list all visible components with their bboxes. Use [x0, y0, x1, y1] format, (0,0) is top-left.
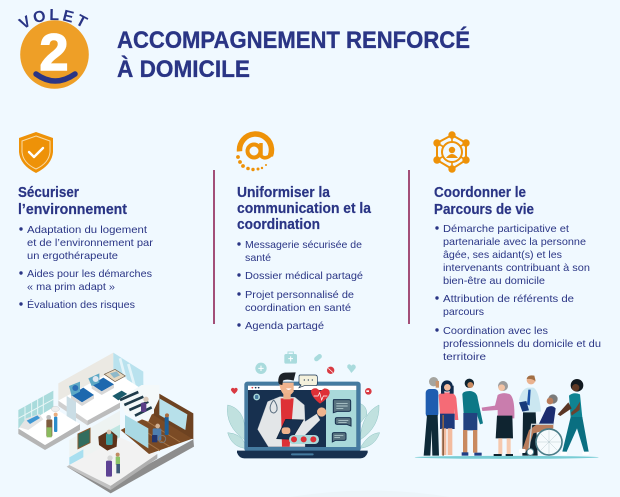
illustration: doctor teleconsultation on laptop	[227, 352, 380, 458]
bullet list: santé	[245, 252, 271, 264]
heading: Parcours de vie	[434, 202, 534, 218]
bullet list: parcours	[443, 306, 484, 318]
bullet list: Évaluation des risques	[27, 298, 135, 311]
title: À DOMICILE	[117, 55, 250, 83]
illustration: isometric home	[18, 353, 194, 493]
icon: shield	[19, 132, 53, 173]
badge: volet 2: 2	[40, 24, 68, 82]
doctor	[258, 372, 330, 447]
panel: uniformiser	[236, 133, 372, 332]
divider right	[408, 170, 410, 324]
bullet list: âgée, ses aidant(s) et les	[443, 249, 562, 261]
bullet list: Projet personnalisé de	[245, 289, 354, 301]
bullet list: un ergothérapeute	[27, 250, 118, 262]
bullet list: professionnels du domicile et du	[443, 338, 601, 350]
bullet list: intervenants contribuant à son	[443, 262, 590, 274]
title: ACCOMPAGNEMENT RENFORCÉ	[117, 26, 470, 54]
heading	[18, 185, 127, 218]
laptop	[237, 382, 368, 458]
bullet list: bien-être au domicile	[443, 275, 545, 287]
bullet list: partenariale avec la personne	[443, 236, 586, 248]
floating icons	[231, 352, 372, 395]
man with tie and folder	[519, 375, 541, 456]
bullet list: Attribution de référents de	[443, 293, 574, 305]
bullet list: Coordination avec les	[443, 325, 548, 337]
nurse	[558, 379, 589, 455]
panel: sécuriser	[18, 132, 154, 311]
divider left	[213, 170, 215, 324]
bullet list	[435, 223, 601, 363]
bullet list: Agenda partagé	[245, 320, 324, 332]
woman in teal	[462, 379, 483, 456]
bullet list: Aides pour les démarches	[27, 268, 152, 280]
bullet list: Messagerie sécurisée de	[245, 239, 362, 251]
chat bubbles	[332, 400, 351, 442]
badge: volet 2	[18, 9, 89, 89]
title	[117, 26, 470, 83]
ground	[415, 456, 599, 459]
leaves	[227, 403, 380, 448]
older woman in pink	[482, 381, 514, 456]
heading: coordination	[237, 217, 320, 233]
bullet list: « ma prim adapt »	[27, 281, 115, 293]
bullet list: et de l’environnement par	[27, 237, 154, 249]
woman in coral	[439, 380, 458, 456]
heading: l’environnement	[18, 202, 127, 218]
bullet list: territoire	[443, 351, 486, 363]
heading: Uniformiser la	[237, 185, 331, 201]
icon: at sign	[236, 133, 273, 171]
heading: communication et la	[237, 201, 372, 217]
heading	[237, 185, 372, 233]
bullet list: Dossier médical partagé	[245, 270, 363, 282]
icon: network	[433, 131, 470, 173]
bullet list: Adaptation du logement	[27, 224, 147, 236]
illustration: group of people and caregivers	[415, 375, 599, 459]
person in wheelchair	[519, 394, 562, 455]
heading: Coordonner le	[434, 185, 526, 201]
older man with cane	[424, 377, 439, 456]
badge: volet 2: VOLET	[18, 9, 88, 28]
bullet list	[237, 239, 363, 332]
bullet list: coordination en santé	[245, 302, 351, 314]
panel: coordonner	[433, 131, 601, 363]
bullet list: Démarche participative et	[443, 223, 569, 235]
bullet list	[19, 224, 154, 311]
heading: Sécuriser	[18, 185, 79, 201]
heading	[434, 185, 534, 218]
